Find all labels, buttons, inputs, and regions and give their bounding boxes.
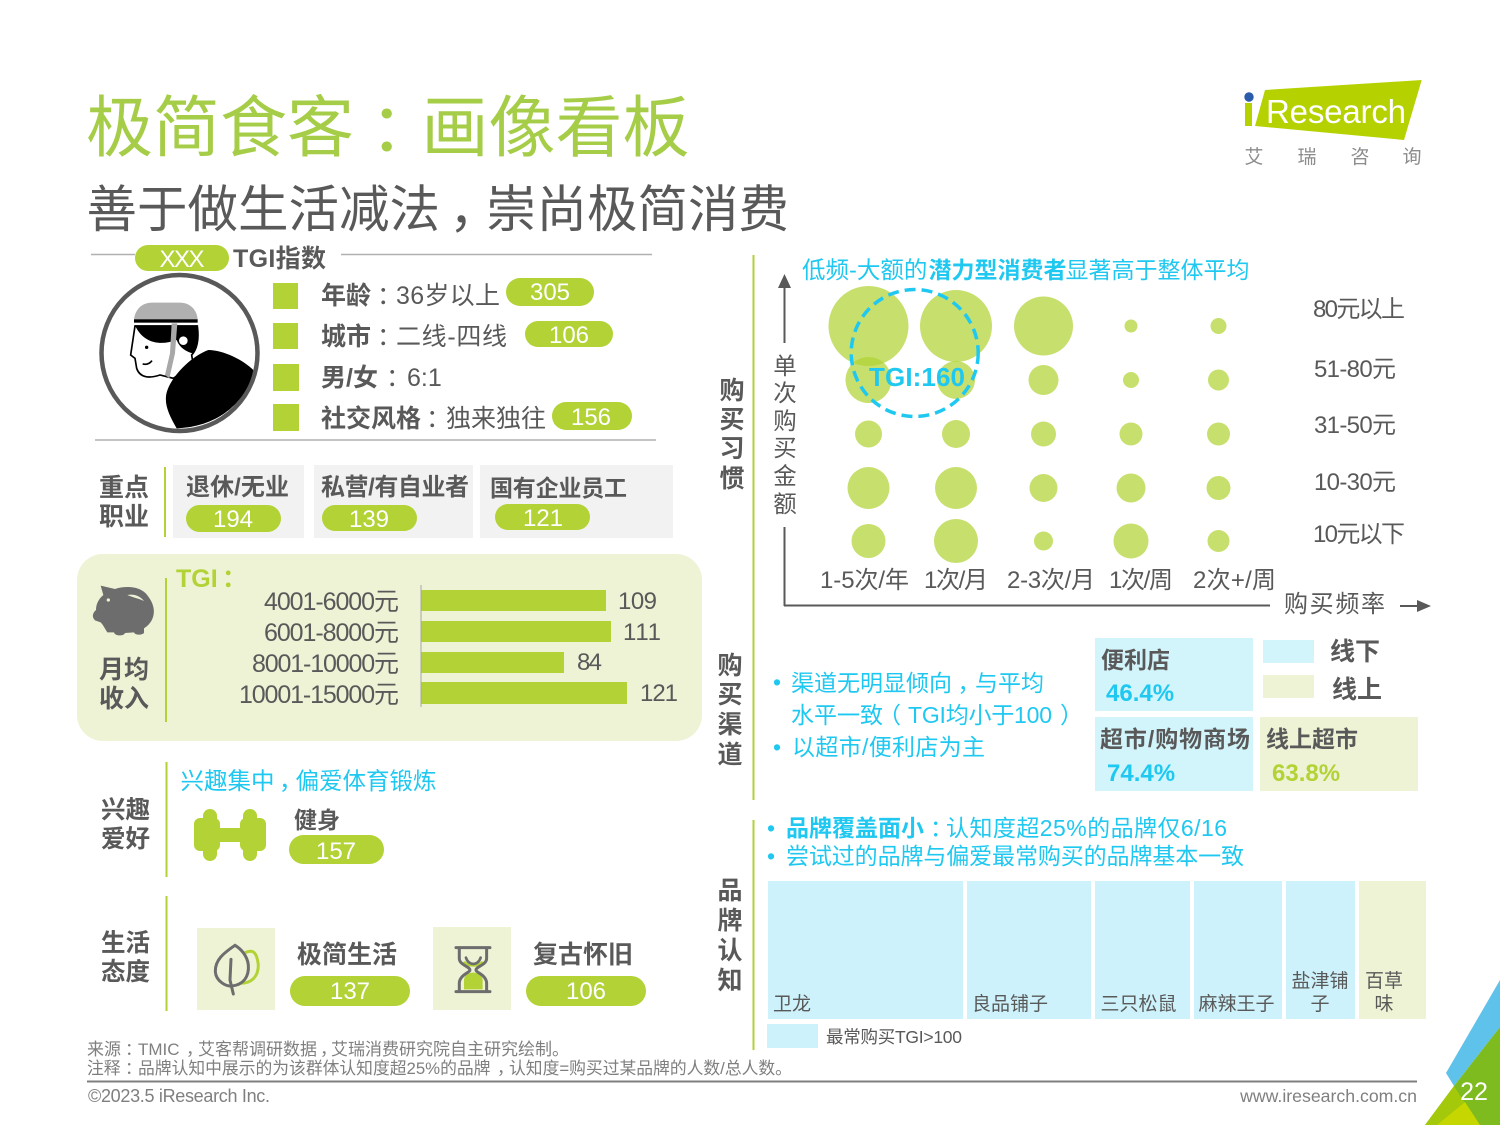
source notes: TMIC xyxy=(138,1040,180,1059)
x categories: 1-5次/年 xyxy=(820,567,909,594)
source notes: 艾客帮调研数据 xyxy=(198,1040,317,1059)
bubble chart heading: 低频-大额的 xyxy=(802,257,927,283)
attribute list: 305 xyxy=(530,279,570,306)
logo: iResearch: 艾 xyxy=(1244,146,1264,168)
section label: buying channels xyxy=(717,652,743,769)
panel: monthly income: TGI xyxy=(176,565,218,593)
y axis label: 金 xyxy=(773,463,797,489)
channel notes: TGI均小于100 xyxy=(908,702,1052,728)
panel: monthly income: 月均 xyxy=(99,656,149,684)
x categories: 2次+/周 xyxy=(1193,567,1276,594)
x categories: 2-3次/月 xyxy=(1007,567,1095,594)
channel notes: 与平均 xyxy=(975,670,1044,696)
attribute list: 156 xyxy=(571,404,611,431)
attribute list: 36岁以上 xyxy=(396,282,500,310)
section label: brand awareness: 知 xyxy=(717,967,743,995)
footer xyxy=(87,1082,1417,1106)
attribute list: ： xyxy=(377,323,402,351)
channel notes: ， xyxy=(958,670,980,696)
brand notes: 品牌覆盖面小 xyxy=(786,815,924,841)
panel: monthly income: 收入 xyxy=(99,685,149,713)
y categories: 80元以上 xyxy=(1313,296,1405,323)
icon: leaf xyxy=(215,945,258,994)
panel: hobbies: 健身 xyxy=(294,807,340,833)
channel legend: 线上 xyxy=(1332,676,1382,704)
channel share blocks: 超市/购物商场 xyxy=(1100,726,1250,752)
callout: TGI 160 xyxy=(851,290,978,416)
channel share blocks: 74.4% xyxy=(1107,760,1175,787)
bar chart: 10001-15000元 xyxy=(239,681,399,709)
section label: brand awareness: 认 xyxy=(717,937,743,965)
attribute list: 独来独往 xyxy=(446,405,546,433)
source notes: 认知度=购买过某品牌的人数/总人数。 xyxy=(509,1059,792,1078)
brand treemap: 良品铺子 xyxy=(972,993,1048,1015)
source notes: 来源 xyxy=(87,1040,121,1059)
logo: iResearch: Research xyxy=(1266,93,1406,130)
panel: lifestyle attitudes: 106 xyxy=(566,978,606,1005)
attribute list xyxy=(95,278,656,440)
attribute list: ： xyxy=(426,405,451,433)
y axis label: 额 xyxy=(773,491,797,517)
channel notes: ） xyxy=(1060,702,1083,728)
title: ： xyxy=(370,91,437,166)
y categories: 51-80元 xyxy=(1314,356,1396,383)
brand treemap xyxy=(768,881,1426,1019)
y categories xyxy=(1313,296,1405,548)
panel: monthly income: ： xyxy=(222,565,247,593)
heading: TGI index: XXX xyxy=(160,246,204,273)
panel: key occupations: 职业 xyxy=(99,503,149,531)
corner decoration with page number xyxy=(1425,980,1500,1125)
panel: key occupations: 121 xyxy=(523,505,563,532)
panel: hobbies: 兴趣 xyxy=(101,796,150,824)
attribute list: 106 xyxy=(549,322,589,349)
source notes: ： xyxy=(125,1040,142,1059)
panel: lifestyle attitudes: 态度 xyxy=(101,958,150,986)
section label: buying habits: 习 xyxy=(719,435,745,463)
x categories: 1次/月 xyxy=(924,567,988,594)
brand notes: 认知度超25%的品牌仅6/16 xyxy=(946,815,1227,841)
y categories: 10元以下 xyxy=(1313,521,1405,548)
footer: ©2023.5 iResearch Inc. xyxy=(88,1086,270,1106)
y categories: 31-50元 xyxy=(1314,412,1396,439)
panel: key occupations: 国有企业员工 xyxy=(490,475,627,501)
brand treemap: 麻辣王子 xyxy=(1198,993,1275,1015)
panel: hobbies: ， xyxy=(279,768,302,794)
logo: iResearch: 询 xyxy=(1402,146,1422,168)
attribute list: 男/女 xyxy=(321,364,378,392)
brand notes xyxy=(767,815,1244,869)
attribute list: 6:1 xyxy=(407,364,442,392)
panel: hobbies: 爱好 xyxy=(101,825,150,853)
subtitle: 善于做生活减法 xyxy=(86,181,440,238)
section label: brand awareness xyxy=(717,877,743,995)
icon: piggy bank xyxy=(93,586,154,635)
bubble chart heading: 显著高于整体平均 xyxy=(1066,257,1250,283)
bar chart xyxy=(239,585,678,709)
panel: lifestyle attitudes: 复古怀旧 xyxy=(533,941,633,969)
brand notes: ： xyxy=(930,815,953,841)
section label: buying channels: 买 xyxy=(717,681,743,709)
brand treemap: 子 xyxy=(1310,994,1330,1015)
section label: buying channels: 渠 xyxy=(717,711,743,739)
bar chart: 84 xyxy=(577,649,602,676)
brand notes: • xyxy=(767,815,775,841)
section label: buying channels: 购 xyxy=(717,652,743,680)
section label: buying habits: 惯 xyxy=(719,465,745,493)
source notes: 注释 xyxy=(87,1059,121,1078)
attribute list: ： xyxy=(377,282,402,310)
brand treemap: 盐津铺 xyxy=(1291,970,1349,992)
brand treemap: 味 xyxy=(1374,993,1394,1015)
attribute list: 二线-四线 xyxy=(396,323,507,351)
heading: TGI index: TGI指数 xyxy=(233,245,326,273)
bar chart: 8001-10000元 xyxy=(252,650,399,678)
bar chart: 4001-6000元 xyxy=(264,588,399,616)
panel: lifestyle attitudes xyxy=(101,896,646,1011)
section label: buying habits xyxy=(719,377,745,493)
y axis label xyxy=(773,353,797,517)
channel notes: • xyxy=(773,734,781,760)
channel notes: 渠道无明显倾向 xyxy=(791,670,952,696)
brand treemap: 百草 xyxy=(1365,970,1403,992)
y categories: 10-30元 xyxy=(1314,469,1396,496)
attribute list: 城市 xyxy=(321,322,371,351)
x axis label: 购买频率 xyxy=(1284,591,1385,618)
channel legend xyxy=(1263,638,1382,704)
channel legend: 线下 xyxy=(1330,638,1380,666)
source notes: 品牌认知中展示的为该群体认知度超25%的品牌 xyxy=(138,1059,491,1078)
subtitle: ， xyxy=(449,181,500,238)
brand notes: • xyxy=(767,843,775,869)
attribute list: 年龄 xyxy=(321,282,371,310)
section label: buying habits: 买 xyxy=(719,406,745,434)
axes xyxy=(778,274,1431,612)
y axis label: 买 xyxy=(773,435,797,461)
brand notes: 尝试过的品牌与偏爱最常购买的品牌基本一致 xyxy=(786,843,1244,869)
panel: key occupations: 私营/有自业者 xyxy=(321,474,469,501)
section label: buying channels: 道 xyxy=(717,741,743,769)
logo: iResearch xyxy=(1244,80,1422,168)
source notes xyxy=(87,1040,792,1078)
bubbles xyxy=(828,286,1230,563)
brand legend xyxy=(767,1024,962,1048)
panel: key occupations: 退休/无业 xyxy=(186,474,289,501)
vertical dividers xyxy=(752,255,754,1050)
footer: www.iresearch.com.cn xyxy=(1239,1086,1417,1106)
y axis label: 次 xyxy=(773,380,797,406)
x categories: 1次/周 xyxy=(1109,567,1173,594)
source notes: ， xyxy=(186,1040,203,1059)
bar chart: 121 xyxy=(640,680,678,707)
panel: lifestyle attitudes: 137 xyxy=(330,978,370,1005)
channel notes xyxy=(773,669,1083,760)
panel: hobbies: 157 xyxy=(316,838,356,865)
corner decoration with page number: 22 xyxy=(1460,1078,1488,1106)
brand treemap: 三只松鼠 xyxy=(1100,993,1177,1015)
panel: monthly income xyxy=(77,554,702,741)
y axis label: 单 xyxy=(773,353,797,379)
channel notes: （ xyxy=(878,702,901,728)
panel: lifestyle attitudes: 极简生活 xyxy=(297,941,397,969)
channel notes: 以超市/便利店为主 xyxy=(792,734,985,760)
panel: key occupations: 重点 xyxy=(99,474,149,502)
icon: person with headband xyxy=(102,275,258,431)
bar chart: 111 xyxy=(623,619,661,646)
panel: lifestyle attitudes: 生活 xyxy=(101,929,150,957)
channel share blocks: 线上超市 xyxy=(1266,726,1358,752)
source notes: ， xyxy=(497,1059,514,1078)
source notes: ： xyxy=(125,1059,142,1078)
icon: dumbbell xyxy=(194,809,266,861)
channel share blocks: 63.8% xyxy=(1272,760,1340,787)
panel: hobbies: 偏爱体育锻炼 xyxy=(296,768,436,794)
panel: key occupations xyxy=(99,465,673,538)
brand legend: 最常购买TGI>100 xyxy=(826,1027,962,1047)
logo: iResearch: 咨 xyxy=(1350,146,1370,168)
section label: brand awareness: 牌 xyxy=(717,907,743,935)
section label: buying habits: 购 xyxy=(719,377,745,405)
subtitle: 崇尚极简消费 xyxy=(486,181,789,238)
section label: brand awareness: 品 xyxy=(717,877,743,905)
channel share blocks: 便利店 xyxy=(1101,647,1170,673)
bar chart: 6001-8000元 xyxy=(264,619,399,647)
channel notes: • xyxy=(773,669,781,695)
panel: hobbies xyxy=(101,762,436,877)
panel: key occupations: 139 xyxy=(349,506,389,533)
bar chart: 109 xyxy=(618,588,657,615)
attribute list: 社交风格 xyxy=(321,405,421,433)
source notes: ， xyxy=(320,1040,337,1059)
title: 画像看板 xyxy=(422,91,690,166)
bubble chart heading: 潜力型消费者 xyxy=(928,257,1066,283)
attribute list: ： xyxy=(386,364,411,392)
panel: key occupations: 194 xyxy=(213,506,253,533)
channel notes: 水平一致 xyxy=(791,702,883,728)
logo: iResearch: 瑞 xyxy=(1297,146,1317,168)
brand treemap: 卫龙 xyxy=(773,993,811,1015)
heading: TGI index xyxy=(91,245,652,273)
callout: TGI 160: TGI:160 xyxy=(869,362,965,392)
y axis label: 购 xyxy=(773,408,797,434)
icon: hourglass xyxy=(456,948,490,992)
panel: hobbies: 兴趣集中 xyxy=(180,768,274,794)
bubble chart xyxy=(773,274,1431,618)
channel share blocks xyxy=(1095,638,1418,791)
channel share blocks: 46.4% xyxy=(1106,680,1174,707)
x categories xyxy=(820,567,1276,594)
title: 极简食客 xyxy=(86,91,354,166)
source notes: 艾瑞消费研究院自主研究绘制。 xyxy=(331,1040,569,1059)
